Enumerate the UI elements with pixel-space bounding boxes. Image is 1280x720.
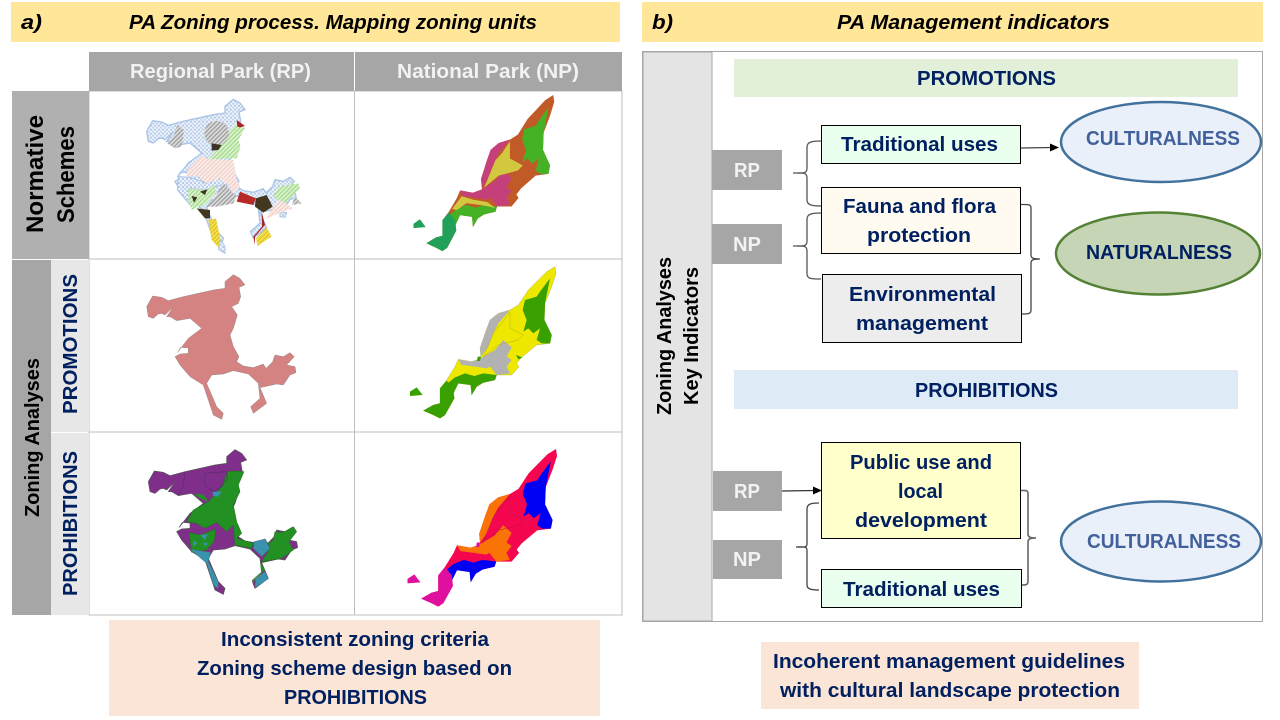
ellipse: naturalness: [1056, 212, 1260, 294]
box: environmental management: Environmental: [849, 284, 996, 306]
row header: Normative Schemes: Schemes: [53, 126, 80, 223]
row header: Normative Schemes: [12, 91, 89, 259]
map: national park promotions: [410, 267, 556, 418]
heading bar a: a): [21, 12, 42, 34]
ellipse: naturalness: NATURALNESS: [1086, 242, 1232, 264]
box: fauna and flora protection: [822, 188, 1020, 254]
RP tag promotions: [712, 150, 782, 190]
box: traditional uses prohibitions: Traditional uses: [843, 579, 1000, 601]
bracket: to culturalness: [1021, 490, 1036, 585]
indicators frame: [642, 52, 1262, 622]
conclusion box b: with cultural landscape protection: [779, 680, 1120, 702]
ellipse: culturalness: CULTURALNESS: [1086, 128, 1240, 150]
box: traditional uses: [822, 126, 1020, 164]
heading bar b: b): [652, 12, 673, 34]
band: prohibitions: [734, 370, 1238, 409]
NP tag prohibitions: [713, 540, 782, 579]
map: national park normative scheme: [414, 95, 554, 251]
panel: a) PA zoning process: [11, 2, 622, 716]
ellipse: culturalness: [1061, 102, 1261, 182]
RP tag promotions: RP: [734, 160, 760, 182]
NP tag promotions: NP: [733, 234, 761, 256]
column header: Regional Park: [89, 52, 354, 91]
arrow to culturalness: [1021, 144, 1059, 152]
conclusion box a: Zoning scheme design based on: [197, 658, 512, 680]
heading bar b: PA Management indicators: [837, 12, 1110, 34]
ellipse: culturalness prohibitions: [1061, 502, 1261, 582]
RP tag prohibitions: RP: [734, 481, 760, 503]
side label: Zoning Analyses Key Indicators: Zoning Analyses: [654, 257, 676, 415]
box: environmental management: management: [856, 313, 988, 335]
NP tag promotions: [712, 224, 782, 264]
heading bar a: PA Zoning process. Mapping zoning units: [129, 12, 537, 34]
map: national park prohibitions: [408, 449, 557, 607]
map: regional park normative scheme: [147, 99, 302, 253]
box: traditional uses prohibitions: [822, 570, 1022, 608]
column header: Regional Park: Regional Park (RP): [130, 61, 311, 83]
side label: Zoning Analyses Key Indicators: [643, 52, 712, 621]
map: regional park prohibitions: [148, 450, 298, 594]
column header: National Park: [355, 52, 622, 91]
bracket: NP to promotions: [793, 213, 821, 279]
zoning matrix table: [12, 52, 622, 615]
conclusion box a: PROHIBITIONS: [284, 687, 427, 709]
bracket: NP to prohibitions: [796, 503, 819, 590]
band: promotions: [734, 59, 1238, 97]
row header: Zoning Analyses: Zoning Analyses: [22, 358, 44, 517]
ellipse: culturalness prohibitions: CULTURALNESS: [1087, 531, 1241, 553]
heading bar a: [11, 2, 620, 42]
row header: Normative Schemes: Normative: [22, 115, 49, 233]
panel: b) PA management indicators: [642, 2, 1263, 709]
box: traditional uses: Traditional uses: [841, 134, 998, 156]
side label: Zoning Analyses Key Indicators: Key Indicators: [681, 267, 703, 405]
box: public use and local development: local: [898, 481, 943, 503]
box: public use and local development: [822, 442, 1020, 538]
map: regional park promotions: [147, 275, 296, 419]
box: environmental management: [822, 274, 1022, 342]
box: public use and local development: Public use and: [850, 452, 992, 474]
box: public use and local development: development: [855, 510, 987, 532]
band: prohibitions: PROHIBITIONS: [915, 380, 1058, 402]
conclusion box a: [109, 620, 600, 716]
bracket: RP to promotions: [793, 141, 821, 206]
conclusion box b: Incoherent management guidelines: [773, 651, 1125, 673]
row header: Promotions: PROMOTIONS: [60, 274, 82, 414]
arrow: RP to public use: [782, 486, 822, 494]
heading bar b: [642, 2, 1263, 42]
box: fauna and flora protection: Fauna and flora: [843, 196, 997, 218]
box: fauna and flora protection: protection: [867, 225, 971, 247]
NP tag prohibitions: NP: [733, 549, 761, 571]
row header: Promotions: [51, 260, 89, 432]
RP tag prohibitions: [713, 471, 782, 511]
column header: National Park: National Park (NP): [397, 61, 579, 83]
conclusion box a: Inconsistent zoning criteria: [221, 629, 490, 651]
conclusion box b: [761, 642, 1139, 709]
bracket: to naturalness: [1021, 204, 1040, 314]
row header: Zoning Analyses: [12, 260, 51, 615]
band: promotions: PROMOTIONS: [917, 68, 1056, 90]
row header: Prohibitions: PROHIBITIONS: [60, 451, 82, 596]
row header: Prohibitions: [51, 433, 89, 615]
